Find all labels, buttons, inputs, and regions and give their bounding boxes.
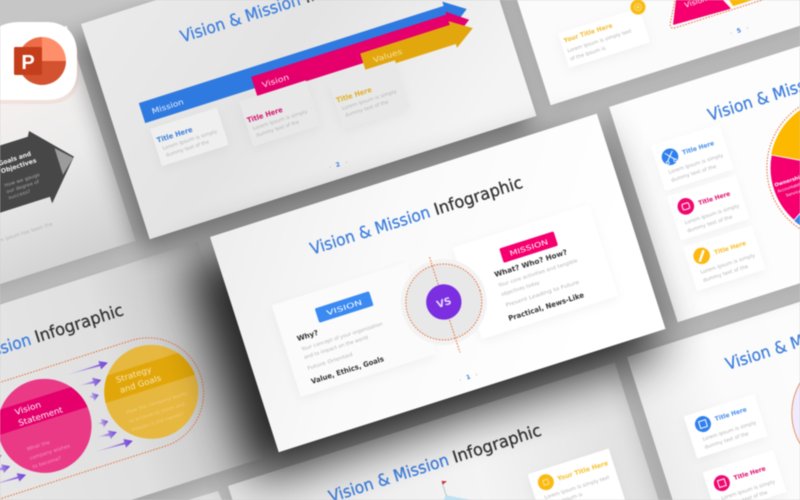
card: cup title: Lorem Ipsum is simply (684, 203, 740, 226)
panel: mission: What? Who? How? (493, 247, 568, 279)
title (326, 421, 544, 500)
panel: vision (272, 262, 436, 397)
page number: ‹ (328, 164, 333, 171)
card: pink title: dummy text of the (255, 119, 300, 139)
panel: mission: Your core activities and tangible (497, 258, 579, 289)
panel: vision: Why? (296, 328, 319, 343)
card: pink title: Title Here (733, 465, 767, 482)
slide: right wheel and cards (599, 0, 800, 329)
purple arrows right (62, 358, 134, 459)
page number: › (344, 159, 349, 166)
card: your title: of the Ipsum is (569, 45, 607, 63)
blue arrow: Mission (151, 97, 185, 116)
panel: vision: and to impact on the world (303, 335, 369, 361)
circle: vision statement: company wishes (29, 443, 71, 462)
page number (458, 371, 479, 384)
card: scissors title (651, 124, 734, 191)
card: gold title (328, 60, 410, 129)
page number (328, 159, 349, 171)
slide: goals and objectives arrow (0, 26, 137, 372)
circle: strategy and goals: How the company wants (126, 390, 189, 416)
card: your title (558, 8, 650, 68)
icon: PowerPoint app tile (0, 22, 79, 104)
card: your title: Your Title Here (562, 21, 614, 45)
page number: › (745, 25, 750, 32)
dark arrow (0, 120, 86, 233)
title (178, 0, 395, 46)
dashed pill (0, 324, 218, 500)
vs badge (389, 244, 501, 366)
slide: central vision vs mission (181, 114, 672, 480)
card: pink title (239, 80, 320, 146)
panel: vision: VISION (326, 299, 363, 317)
card: scissors title: dummy text of the (671, 164, 717, 184)
circle: strategy and goals: and Goals (118, 372, 162, 395)
blue arrow (137, 0, 471, 127)
title: Infographic (32, 300, 126, 347)
circle: strategy and goals: Strategy (114, 364, 153, 385)
card: gold title: dummy text of the (345, 99, 389, 119)
arrow label: success? (8, 188, 32, 201)
slide: vision and mission arrows, page 2 (70, 0, 540, 254)
circle: vision statement: Statement (17, 404, 65, 428)
gold arrow: Values (372, 47, 403, 65)
card: blue title: Lorem Ipsum is simply (702, 420, 757, 443)
page number: › (474, 371, 479, 379)
pink pyramid segment (655, 0, 730, 26)
arrow label: Objectives (0, 157, 38, 175)
card: pink title: Lorem Ipsum is simply (252, 109, 308, 132)
card: your title: Lorem Ipsum is simply text (567, 28, 632, 54)
page number: ‹ (729, 30, 734, 37)
icon: target (629, 0, 647, 17)
slide: page 5 (474, 0, 800, 113)
circle: vision statement: What the (26, 440, 51, 453)
vs badge: VS (435, 296, 453, 311)
page number: 2 (335, 161, 341, 169)
card: clip title: dummy text of the (702, 264, 749, 284)
flag and mountain (418, 473, 479, 500)
panel: mission: Practical, News-Like (507, 290, 585, 323)
card: blue title: Title Here (156, 125, 194, 145)
purple arrows left (0, 446, 27, 492)
slide: vision statement circles (0, 259, 260, 500)
card: clip title: Lorem Ipsum is simply (700, 253, 756, 276)
arrow label (0, 150, 46, 201)
card: gold title: Title Here (335, 85, 373, 105)
circle: strategy and goals: to achieve its vision and (128, 401, 186, 425)
panel: mission: objectives today (501, 280, 541, 298)
title (0, 300, 126, 386)
circle: vision statement: Vision (13, 399, 42, 417)
card: pink title (703, 450, 787, 500)
title: Infographic (432, 173, 525, 219)
panel: vision: Value, Ethics, Goals (310, 354, 385, 386)
dashed outline (652, 0, 800, 29)
slide fragment: lower left corner (188, 491, 222, 500)
card: gold title: Lorem Ipsum is simply (341, 89, 397, 112)
arrow label: How we gauge (4, 172, 41, 189)
panel: vision: Future Oriented (307, 352, 353, 372)
card: scissors title: Title Here (682, 140, 715, 157)
circle: vision statement (0, 378, 92, 474)
title: Infographic (450, 421, 544, 467)
card: your title here (528, 449, 627, 500)
arrow fold (54, 144, 77, 175)
pink arrow: Vision (261, 72, 290, 90)
gold arrow (359, 15, 477, 76)
card: scissors title: Lorem Ipsum is simply (668, 153, 724, 176)
panel: vision: Your concept of your organization (300, 321, 384, 353)
panel: mission: Present Leading to Future (505, 280, 580, 309)
page number: 5 (736, 27, 742, 35)
icon: PowerPoint logo: P (21, 52, 35, 74)
card: your title here: Your Title Here (555, 459, 610, 483)
card: blue title: dummy text of the (704, 431, 750, 451)
card: cup title: dummy text of the (687, 214, 733, 234)
card: blue title: Lorem Ipsum is simply (162, 129, 218, 152)
page number: 1 (465, 374, 472, 382)
card: cup title: Title Here (698, 190, 731, 207)
card: blue title (150, 108, 229, 166)
card: cup title (667, 175, 750, 240)
slide: bottom right cards (617, 234, 800, 500)
circle: strategy and goals (103, 344, 199, 440)
gold segment (695, 0, 796, 12)
card: blue title: Title Here (714, 406, 748, 423)
circle: vision statement: to become? (32, 455, 63, 470)
lavender circle (776, 338, 800, 489)
pie wheel (748, 76, 800, 259)
card: clip title (683, 225, 766, 291)
pink arrow (250, 6, 473, 102)
page number (729, 25, 750, 37)
panel: mission (453, 204, 618, 339)
card: pink title: Title Here (246, 105, 284, 125)
circle: strategy and goals: mission in the market? (131, 411, 185, 433)
card: blue title (684, 394, 768, 458)
page number: ‹ (458, 376, 463, 384)
card: clip title: Title Here (713, 240, 747, 257)
title: Vision & Mission (308, 202, 433, 259)
panel: mission: MISSION (509, 238, 549, 258)
arrow label: our degree of (6, 179, 40, 195)
card: blue title: dummy text of the (165, 139, 210, 159)
title (308, 173, 525, 259)
slide: mountain and your title (220, 363, 685, 500)
